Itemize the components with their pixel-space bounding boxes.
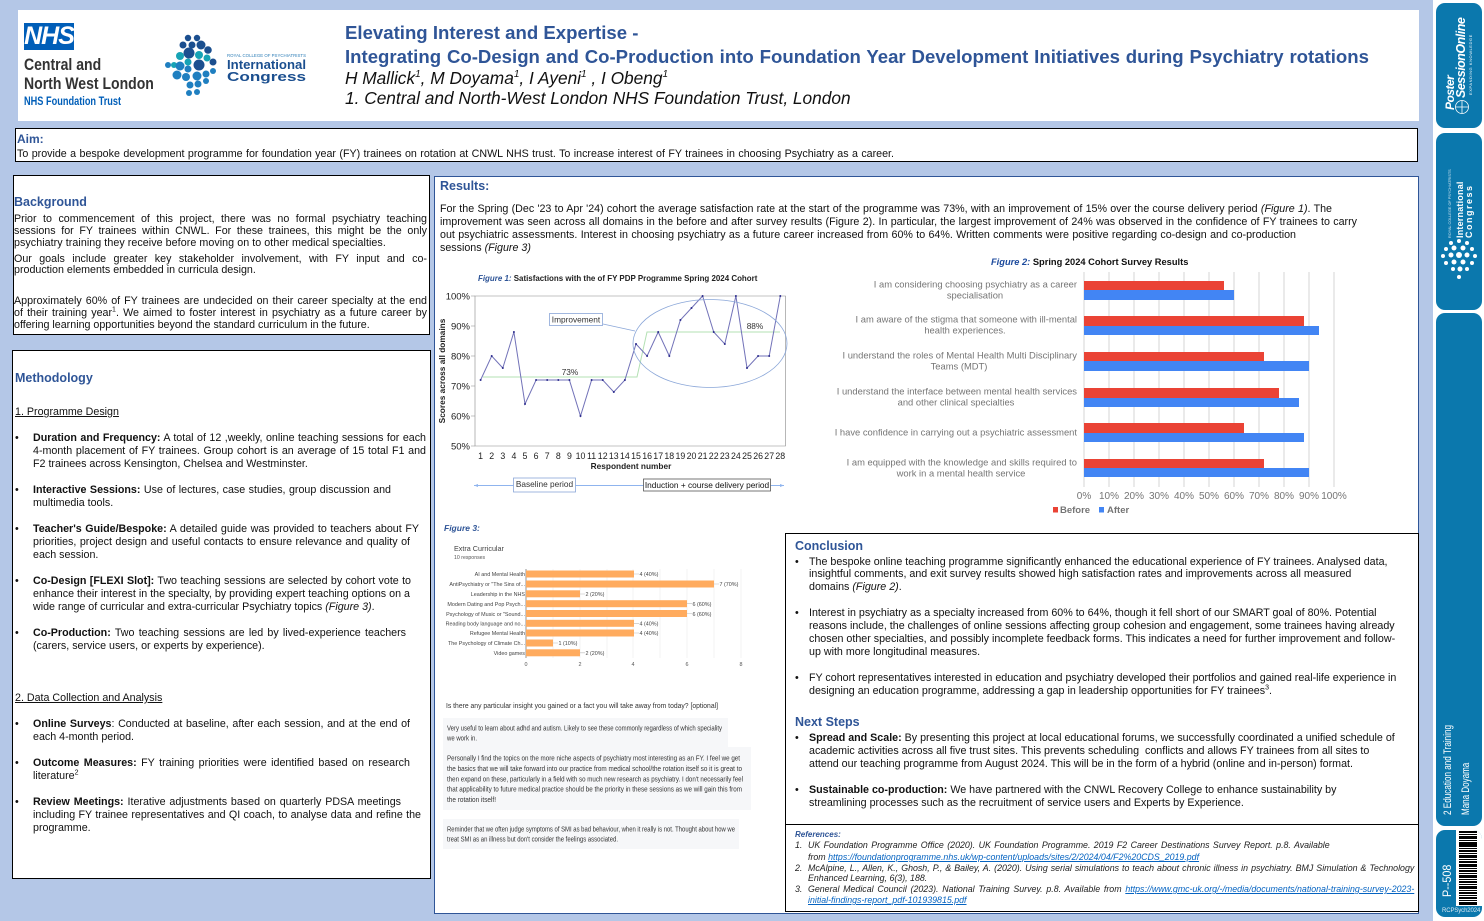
- free-text survey comments: Is there any particular insight you gained or a fact you will take away from today? [optional]: [446, 701, 718, 710]
- reference 3: 3.: [795, 884, 802, 895]
- next steps bullet 1: attend our teaching programme from August 2024. This will be in the form of a hybrid (online and in-person) format.: [809, 758, 1353, 770]
- affiliation: 1. Central and North-West London NHS Foundation Trust, London: [345, 88, 851, 108]
- chart: figure 3 extra curricular: 10 responses: [454, 555, 486, 561]
- bullet: interactive sessions: multimedia tools.: [33, 497, 113, 509]
- background text: [14, 213, 427, 331]
- subheading: programme design: 1. Programme Design: [15, 406, 119, 418]
- bullet: co-design: wide range of curricular and extra-curricular Psychiatry topics (Figure 3).: [33, 601, 375, 613]
- chart: figure 1 run chart: 25: [742, 451, 752, 461]
- results text: out psychiatric assessments. Interest in choosing psychiatry as a future career increased from 60% to 64%. Written comments were positive regarding co-design and co-production: [440, 229, 1296, 241]
- chart: figure 2 survey results: I am equipped with the knowledge and skills required to: [847, 456, 1077, 468]
- chart: figure 1 run chart: 13: [609, 451, 619, 461]
- chart: figure 2 survey results: I understand the interface between mental health services: [837, 386, 1077, 396]
- bullet: online surveys: Online Surveys: Conducted at baseline, after each session, and at the end of: [33, 718, 410, 730]
- chart: figure 1 run chart: 8: [556, 451, 561, 461]
- conclusion bullet 3: designing an education programme, addressing a gap in leadership opportunities for FY trainees3.: [809, 684, 1272, 697]
- chart: figure 3 extra curricular: Refugee Mental Health: [470, 631, 525, 637]
- chart: figure 3 extra curricular: Leadership in the NHS: [471, 592, 525, 598]
- background text: offering learning opportunities beyond the standard curriculum in the future.: [14, 319, 370, 331]
- chart: figure 1 run chart: 21: [698, 451, 708, 461]
- chart: figure 1 run chart: 88%: [747, 321, 764, 331]
- chart: figure 2 survey results: 50%: [1199, 491, 1219, 502]
- results text: For the Spring (Dec '23 to Apr '24) cohort the average satisfaction rate at the start of the programme was 73%, with an improvement of 15% over the course delivery period (Figure 1). The: [440, 203, 1332, 215]
- reference 2: 2.: [795, 863, 802, 874]
- bullet: duration and frequency: 4-month placement of FY trainees. Group cohort is an average of 15 total F1 and: [33, 445, 426, 457]
- bullet: teacher's guide: each session.: [33, 549, 98, 561]
- chart: figure 1 run chart: 16: [642, 451, 652, 461]
- background text: Prior to commencement of this project, there was no formal psychiatry teaching: [14, 213, 427, 225]
- chart: figure 3 extra curricular: 6 (60%): [692, 602, 712, 608]
- background text: Approximately 60% of FY trainees are undecided on their career specialty at the end: [14, 295, 427, 307]
- bullet: co-production: (carers, service users, or experts by experience).: [33, 640, 265, 652]
- conclusion bullet 1: domains (Figure 2).: [809, 581, 902, 593]
- sidebar tab: International Congress: ROYAL COLLEGE OF PSYCHIATRISTS: [1448, 169, 1452, 238]
- chart: figure 1 run chart: 23: [720, 451, 730, 461]
- conclusion bullet 1: •: [795, 556, 799, 568]
- logo: Royal College of Psychiatrists International Congress: Congress: [227, 69, 306, 84]
- chart: figure 3 extra curricular: 2 (20%): [586, 592, 605, 598]
- conclusion bullet 1: The bespoke online teaching programme significantly enhanced the educational experience of FY trainees. Analysed data,: [809, 556, 1388, 568]
- panel: results: [434, 176, 1419, 914]
- chart: figure 3 extra curricular: 6: [686, 662, 688, 668]
- chart: figure 2 survey results: 80%: [1274, 491, 1294, 502]
- bullet: outcome measures: [15, 757, 410, 782]
- sidebar tab: topic and author: [1436, 313, 1482, 826]
- free-text survey comments: Very useful to learn about adhd and autism. Likely to see these commonly regardless of which speciality: [447, 726, 722, 732]
- header banner: [18, 10, 1419, 121]
- chart: figure 3 extra curricular: [444, 523, 742, 668]
- chart: figure 3 extra curricular: Psychology of Music or "Sound...: [446, 612, 525, 618]
- bullet: co-design: •: [15, 575, 19, 587]
- reference 2: McAlpine, L., Allen, K., Ghosh, P., & Bailey, A. (2020). Using serial simulations to teach about chronic illness in psychiatry. BMJ Simulation & Technology: [808, 863, 1414, 874]
- bullet: interactive sessions: •: [15, 484, 19, 496]
- icon: congress dots: [1441, 239, 1477, 279]
- next steps bullet 2: [795, 784, 1336, 809]
- chart: figure 1 run chart: 27: [764, 451, 774, 461]
- next steps bullet 2: streamlining processes such as the recruitment of service users and Experts by Experience.: [809, 797, 1244, 809]
- chart: figure 1 run chart: Scores across all domains: [437, 318, 447, 423]
- chart: figure 2 survey results: health experiences.: [924, 324, 1006, 336]
- chart: figure 3 extra curricular: 4: [632, 662, 634, 668]
- chart: figure 2 survey results: 100%: [1321, 491, 1347, 502]
- chart: figure 2 survey results: 40%: [1174, 491, 1194, 502]
- bullet: co-design: enhance their interest in the specialty, by providing expert teaching options on a: [33, 588, 410, 600]
- aim text: To provide a bespoke development programme for foundation year (FY) trainees on rotation at CNWL NHS trust. To increase interest of FY trainees in choosing Psychiatry as a career.: [17, 148, 894, 160]
- conclusion bullet 3: FY cohort representatives interested in education and psychiatry developed their portfolios and gained real-life experience in: [809, 672, 1396, 684]
- reference 1: from https://foundationprogramme.nhs.uk/wp-content/uploads/sites/2/2024/04/F2%20CDS_2019.pdf: [808, 852, 1199, 863]
- chart: figure 3 extra curricular: 2 (20%): [586, 651, 605, 657]
- reference 1: 1.: [795, 840, 802, 851]
- methodology heading: Methodology: [15, 371, 93, 385]
- logo: Royal College of Psychiatrists International Congress: [165, 34, 306, 96]
- next steps bullet 1: Spread and Scale: By presenting this project at local educational forums, we successfully coordinated a unified schedule of: [809, 732, 1395, 744]
- chart: figure 2 survey results: I am aware of the stigma that someone with ill-mental: [856, 314, 1077, 324]
- chart: figure 1 run chart: 60%: [451, 412, 471, 422]
- sidebar tab: International Congress: Congress: [1464, 184, 1474, 238]
- bullet: online surveys: •: [15, 718, 19, 730]
- free-text survey comments: [443, 701, 751, 849]
- chart: figure 2 survey results: 20%: [1124, 491, 1144, 502]
- chart: figure 3 extra curricular: Modern Dating and Pop Psych...: [447, 602, 525, 608]
- bullet: online surveys: [15, 718, 410, 743]
- bullet: interactive sessions: Interactive Sessions: Use of lectures, case studies, group discussion and: [33, 484, 391, 496]
- sidebar tab: International Congress: [1436, 133, 1482, 310]
- chart: figure 1 run chart: 28: [775, 451, 785, 461]
- bullet: duration and frequency: F2 trainees across Kensington, Chelsea and Westminster.: [33, 458, 308, 470]
- results heading: Results:: [440, 179, 489, 193]
- panel: methodology: [12, 350, 431, 879]
- chart: figure 2 survey results: and other clinical specialties: [898, 396, 1015, 408]
- chart: figure 1 run chart: 24: [731, 451, 741, 461]
- bullet: interactive sessions: [15, 484, 391, 509]
- bullet: outcome measures: literature2: [33, 769, 78, 782]
- bullet: teacher's guide: [15, 523, 419, 561]
- reference 3: [795, 884, 1414, 906]
- chart: figure 3 extra curricular: 8: [740, 662, 742, 668]
- chart: figure 1 run chart: Improvement: [552, 314, 601, 324]
- reference 2: [795, 863, 1415, 884]
- chart: figure 1 run chart: 19: [676, 451, 685, 461]
- bullet: review meetings: Review Meetings: Iterative adjustments based on quarterly PDSA meetings: [33, 796, 401, 808]
- results text: improvement was seen across all domains in the before and after survey results (Figure 2). In particular, the largest improvement of 24% was observed in the confidence of FY trainees to carry: [440, 216, 1357, 228]
- sidebar tab: Poster Session Online: EXPANDING KNOWLEDGE: [1468, 34, 1473, 95]
- conclusion bullet 2: chosen other specialties, and possibly incomplete feedback forms. This indicates a need for further improvement and follow-: [809, 633, 1395, 645]
- chart: figure 2 survey results: 0%: [1077, 491, 1091, 502]
- chart: figure 1 run chart: 80%: [451, 352, 471, 362]
- chart: figure 1 run chart: Baseline period: [516, 479, 573, 489]
- chart: figure 1 run chart: Respondent number: [591, 461, 672, 471]
- chart: figure 2 survey results: Teams (MDT): [931, 360, 987, 372]
- references heading: References:: [795, 830, 841, 839]
- chart: figure 1 run chart: 90%: [451, 322, 471, 332]
- conclusion bullet 2: •: [795, 607, 799, 619]
- next steps bullet 2: Sustainable co-production: We have partnered with the CNWL Recovery College to enhance sustainability by: [809, 784, 1336, 796]
- chart: figure 3 extra curricular: Figure 3:: [444, 523, 480, 533]
- bullet: co-production: Co-Production: Two teaching sessions are led by lived-experience teachers: [33, 627, 406, 639]
- logo: Royal College of Psychiatrists International Congress: ROYAL COLLEGE OF PSYCHIATRISTS: [227, 53, 306, 58]
- chart: figure 1 run chart: [437, 274, 788, 492]
- chart: figure 1 run chart: Induction + course delivery period: [645, 480, 770, 490]
- panel: aim: [15, 128, 1418, 162]
- bullet: co-design: Co-Design [FLEXI Slot]: Two teaching sessions are selected by cohort vote to: [33, 575, 411, 587]
- reference 1: UK Foundation Programme Office (2020). UK Foundation Programme. 2019 F2 Career Destinations Survey Report. p.8. Available: [808, 840, 1330, 851]
- chart: figure 2 survey results: specialisation: [947, 290, 1003, 300]
- reference 3: General Medical Council (2023). National Training Survey. p.8. Available from https://www.gmc-uk.org/-/media/documents/national-training-survey-2023-: [808, 884, 1414, 895]
- sidebar tab: topic and author: Mana Doyama: [1460, 763, 1472, 815]
- chart: figure 1 run chart: 11: [587, 451, 596, 461]
- authors: H Mallick1, M Doyama1, I Ayeni1 , I Obeng1: [345, 68, 668, 88]
- conclusion bullet 2: up with more longitudinal measures.: [809, 646, 980, 658]
- chart: figure 1 run chart: 4: [511, 451, 516, 461]
- free-text survey comments: we work in.: [446, 736, 477, 742]
- chart: figure 3 extra curricular: AI and Mental Health: [475, 572, 525, 578]
- bullet: co-design: [15, 575, 411, 613]
- chart: figure 2 survey results: 60%: [1224, 491, 1244, 502]
- chart: figure 3 extra curricular: Reading body language and no...: [446, 622, 525, 628]
- chart: figure 1 run chart: 70%: [451, 382, 471, 392]
- chart: figure 3 extra curricular: 1 (10%): [558, 641, 578, 647]
- bullet: duration and frequency: [15, 432, 426, 470]
- conclusion bullet 2: reasons include, the challenges of online sessions affecting group cohesion and engagement, some trainees having already: [809, 620, 1395, 632]
- panel: references: [785, 824, 1419, 912]
- reference 2: Enhanced Learning, 6(3), 188.: [808, 873, 927, 884]
- chart: figure 2 survey results: 30%: [1149, 491, 1169, 502]
- chart: figure 1 run chart: 7: [545, 451, 550, 461]
- logo: NHS Central and North West London: NHS Foundation Trust: [24, 96, 121, 108]
- sidebar tab: Poster Session Online: [1436, 3, 1482, 128]
- chart: figure 1 run chart: 14: [620, 451, 630, 461]
- chart: figure 1 run chart: 15: [631, 451, 641, 461]
- bullet: teacher's guide: priorities, project design and useful contacts to ensure relevance and quality of: [33, 536, 410, 548]
- sidebar tab: poster number and barcode: RCPSych2024: [1442, 908, 1480, 914]
- conclusion bullet 3: [795, 672, 1396, 697]
- chart: figure 1 run chart: 50%: [451, 442, 471, 452]
- next steps bullet 2: •: [795, 784, 799, 796]
- chart: figure 1 run chart: 73%: [562, 367, 579, 377]
- conclusion heading: Conclusion: [795, 539, 863, 553]
- bullet: review meetings: programme.: [33, 822, 91, 834]
- background text: sessions for FY trainees within CNWL. For these trainees, this might be the only: [14, 225, 427, 237]
- bullet: online surveys: each 4-month period.: [33, 731, 134, 743]
- chart: figure 1 run chart: 100%: [446, 292, 471, 302]
- chart: figure 3 extra curricular: 7 (70%): [720, 582, 739, 588]
- results text: sessions (Figure 3): [440, 242, 531, 254]
- next steps heading: Next Steps: [795, 715, 860, 729]
- free-text survey comments: treat SMI as an illness but don't consider the feelings associated.: [447, 836, 618, 844]
- conclusion bullet 3: •: [795, 672, 799, 684]
- sidebar tab: Poster Session Online: Poster: [1443, 76, 1457, 110]
- bullet: review meetings: including FY trainee representatives and QI coach, to analyse data and refine the: [33, 809, 421, 821]
- reference 3: initial-findings-report_pdf-101939815.pdf: [808, 895, 966, 906]
- chart: figure 2 survey results: I am considering choosing psychiatry as a career: [874, 278, 1077, 290]
- chart: figure 2 survey results: Before: [1060, 505, 1090, 516]
- bullet: co-production: •: [15, 627, 19, 639]
- chart: figure 1 run chart: 10: [576, 451, 585, 461]
- sidebar tab: poster number and barcode: [1436, 830, 1482, 917]
- logo: Royal College of Psychiatrists International Congress: International: [227, 57, 306, 72]
- bullet: co-production: [15, 627, 406, 652]
- chart: figure 3 extra curricular: 4 (40%): [640, 622, 659, 628]
- next steps bullet 1: academic activities across all five trust sites. This prevents scheduling conflicts and allows FY trainees from all sites to: [809, 745, 1369, 757]
- logo: NHS Central and North West London: [24, 22, 154, 108]
- bullet: review meetings: [15, 796, 421, 834]
- bullet: teacher's guide: •: [15, 523, 19, 535]
- chart: figure 3 extra curricular: AntiPsychiatry or "The Sins of...: [449, 582, 525, 588]
- bullet: teacher's guide: Teacher's Guide/Bespoke: A detailed guide was provided to teachers about FY: [33, 523, 419, 535]
- sidebar tab: Poster Session Online: SessionOnline: [1454, 18, 1468, 98]
- chart: figure 1 run chart: 2: [489, 451, 494, 461]
- chart: figure 3 extra curricular: 6 (60%): [692, 612, 712, 618]
- sidebar: [1433, 0, 1484, 921]
- bullet: duration and frequency: Duration and Frequency: A total of 12 ,weekly, online teaching sessions for each: [33, 432, 426, 444]
- subheading: data collection: 2. Data Collection and Analysis: [15, 692, 162, 704]
- chart: figure 1 run chart: 6: [534, 451, 539, 461]
- chart: figure 3 extra curricular: 4 (40%): [640, 631, 659, 637]
- conclusion bullet 1: insightful comments, and exit survey results showed high satisfaction rates and improvements across all measured: [809, 568, 1351, 580]
- chart: figure 3 extra curricular: Extra Curricular: [454, 544, 505, 553]
- chart: figure 2 survey results: 10%: [1099, 491, 1119, 502]
- chart: figure 2 survey results: I understand the roles of Mental Health Multi Disciplinary: [842, 350, 1077, 360]
- barcode: [1459, 831, 1477, 905]
- chart: figure 1 run chart: 26: [753, 451, 763, 461]
- sidebar tab: International Congress: International: [1455, 181, 1465, 238]
- chart: figure 1 run chart: 9: [567, 451, 572, 461]
- background text: Our goals include greater key stakeholder involvement, with FY input and co-: [14, 253, 427, 265]
- background text: production elements embedded in curricula design.: [14, 264, 256, 276]
- chart: figure 2 survey results: [835, 257, 1347, 516]
- logo: NHS Central and North West London: NHS: [24, 22, 74, 50]
- conclusion bullet 2: [795, 607, 1395, 658]
- chart: figure 1 run chart: 17: [653, 451, 663, 461]
- chart: figure 3 extra curricular: 4 (40%): [640, 572, 659, 578]
- reference 1: [795, 840, 1330, 863]
- aim heading: Aim:: [17, 132, 44, 146]
- panel: background: [13, 175, 430, 335]
- chart: figure 1 run chart: 22: [709, 451, 719, 461]
- results text: [440, 203, 1357, 254]
- icon: globe: [1455, 100, 1469, 114]
- logo: NHS Central and North West London: North West London: [24, 75, 154, 93]
- chart: figure 1 run chart: 20: [687, 451, 696, 461]
- background text: of their training year1. We aimed to foster interest in psychiatry as a future career by: [14, 306, 427, 319]
- sidebar tab: topic and author: 2 Education and Training: [1442, 725, 1454, 815]
- chart: figure 2 survey results: I have confidence in carrying out a psychiatric assessment: [835, 426, 1077, 438]
- bullet: review meetings: •: [15, 796, 19, 808]
- chart: figure 1 run chart: 18: [664, 451, 674, 461]
- chart: figure 3 extra curricular: 2: [578, 662, 582, 668]
- title: Elevating Interest and Expertise -: [345, 22, 638, 43]
- chart: figure 2 survey results: After: [1107, 505, 1129, 516]
- background text: psychiatry training they receive before moving on to other medical specialties.: [14, 237, 386, 249]
- chart: figure 1 run chart: 3: [500, 451, 505, 461]
- chart: figure 1 run chart: 12: [598, 451, 608, 461]
- free-text survey comments: the rotation itself!: [447, 797, 496, 804]
- header banner: Integrating Co-Design and Co-Production into Foundation Year Development Initiatives during Psychiatry rotations: [345, 46, 1369, 67]
- background heading: Background: [14, 195, 87, 209]
- bullet: outcome measures: •: [15, 757, 19, 769]
- free-text survey comments: the basics that we will take forward into our practice from medical school/the rotation itself so it is great to: [447, 766, 742, 773]
- next steps bullet 1: •: [795, 732, 799, 744]
- chart: figure 3 extra curricular: Video games: [494, 651, 525, 657]
- chart: figure 3 extra curricular: The Psychology of Climate Ch...: [448, 641, 525, 647]
- next steps bullet 1: [795, 732, 1395, 770]
- chart: figure 1 run chart: Figure 1: Satisfactions with the of FY PDP Programme Spring 2024 Cohort: [478, 274, 758, 283]
- chart: figure 3 extra curricular: 0: [524, 662, 528, 668]
- chart: figure 2 survey results: Figure 2: Spring 2024 Cohort Survey Results: [991, 257, 1188, 267]
- logo: NHS Central and North West London: Central and: [24, 56, 101, 74]
- bullet: duration and frequency: •: [15, 432, 19, 444]
- conclusion bullet 1: [795, 556, 1388, 593]
- panel: conclusion and next steps: [785, 533, 1419, 825]
- chart: figure 2 survey results: 90%: [1299, 491, 1319, 502]
- sidebar tab: poster number and barcode: P--508: [1440, 865, 1454, 897]
- conclusion bullet 2: Interest in psychiatry as a specialty increased from 60% to 64%, though it fell short of our SMART goal of 80%. Potential: [809, 607, 1377, 619]
- bullet: outcome measures: Outcome Measures: FY training priorities were identified based on research: [33, 757, 410, 769]
- chart: figure 1 run chart: 5: [523, 451, 528, 461]
- chart: figure 2 survey results: work in a mental health service: [896, 468, 1025, 478]
- chart: figure 1 run chart: 1: [478, 451, 483, 461]
- chart: figure 2 survey results: 70%: [1249, 491, 1269, 502]
